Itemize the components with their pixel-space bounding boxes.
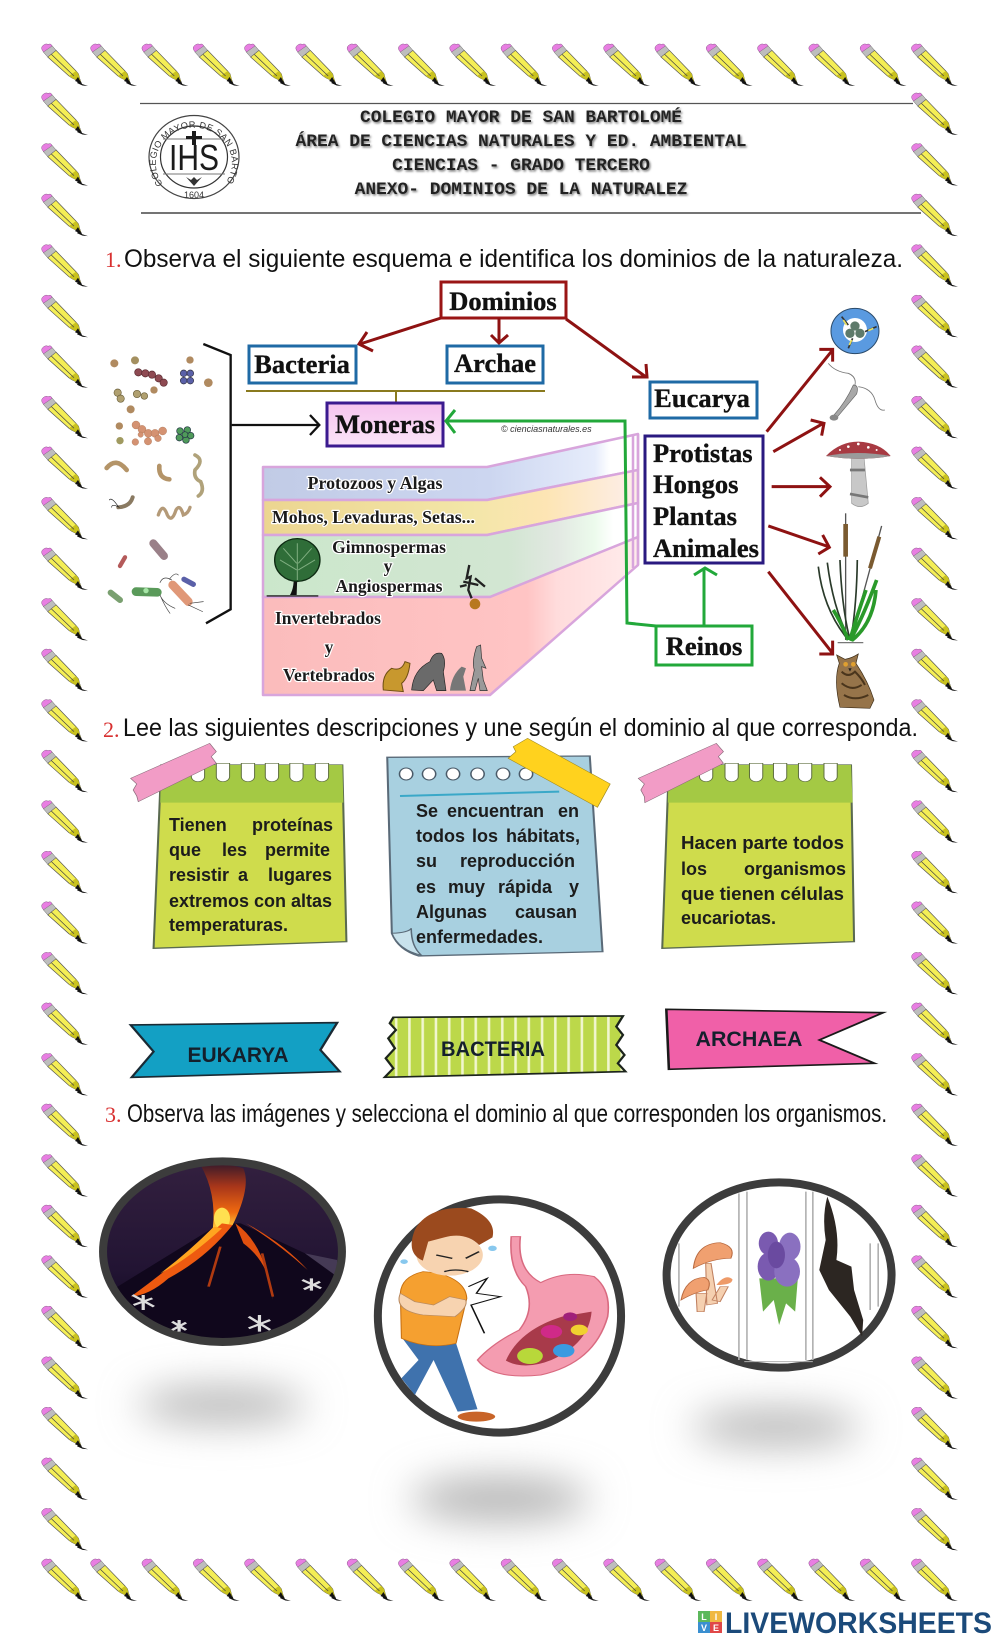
green arrows: [446, 410, 717, 626]
note text: su: [416, 851, 437, 871]
header: [140, 102, 921, 214]
logo: LIVEWORKSHEETS: I: [715, 1612, 717, 1622]
note text: hábitats,: [506, 826, 580, 846]
heading 2: Lee las siguientes descripciones y une según el dominio al que corresponda.: [123, 714, 918, 742]
note text: muy: [448, 877, 485, 897]
shadows under circles: [137, 1387, 861, 1521]
logo: LIVEWORKSHEETS: E: [713, 1623, 719, 1633]
note text: Se: [416, 801, 438, 821]
box: kingdoms: Animales: [653, 533, 759, 563]
icon: bacteria group: [107, 356, 213, 613]
domains diagram: [107, 282, 891, 708]
note text: resistir: [169, 865, 229, 885]
note text: todos: [416, 826, 465, 846]
note text: Tienen: [169, 815, 227, 835]
flowers: [758, 1232, 801, 1325]
note text: encuentran: [447, 801, 544, 821]
layer labels: Angiospermas: [336, 576, 443, 596]
note: left: [131, 743, 346, 948]
note text: extremos con altas: [169, 891, 332, 911]
banner: ARCHAEA: ARCHAEA: [696, 1028, 802, 1051]
banner: BACTERIA: BACTERIA: [441, 1038, 545, 1061]
box: Archae: [447, 346, 543, 383]
arrows from Dominios: [359, 318, 647, 377]
note text: los: [472, 826, 498, 846]
logo: LIVEWORKSHEETS: LIVEWORKSHEETS: [725, 1607, 992, 1640]
note text: lugares: [268, 865, 332, 885]
note text: Hacen parte todos: [681, 833, 844, 853]
icon: owl: [836, 654, 874, 708]
icon: mushroom: [826, 442, 891, 507]
note text: y: [569, 877, 579, 897]
red arrows to kingdoms: [767, 349, 833, 654]
box: kingdoms: [645, 436, 763, 563]
icon: school seal: 1604: [184, 190, 204, 200]
image: boy with stomach ache: [378, 1199, 621, 1433]
layer labels: y: [384, 556, 393, 576]
boy: [399, 1208, 501, 1422]
note: right: [638, 743, 854, 948]
box: Eucarya: Eucarya: [654, 383, 750, 413]
header text: ANEXO- DOMINIOS DE LA NATURALEZ: [355, 180, 687, 200]
note: centre: [387, 738, 610, 956]
stomach: [477, 1237, 608, 1376]
note text: es: [416, 877, 436, 897]
tape: [638, 743, 723, 803]
icon: cattails: [818, 513, 882, 643]
note text: organismos: [744, 859, 846, 879]
box: Dominios: Dominios: [449, 286, 557, 316]
icon: flagellate: [828, 363, 885, 421]
tape: [508, 738, 610, 807]
note text: proteínas: [252, 815, 333, 835]
layer labels: Mohos, Levaduras, Setas...: [272, 507, 475, 527]
box: Reinos: [656, 626, 752, 665]
image: eukaryotes circle: [667, 1182, 892, 1368]
note text: Algunas: [416, 902, 487, 922]
logo: LIVEWORKSHEETS: V: [701, 1623, 707, 1633]
note text: permite: [265, 840, 330, 860]
layer labels: [272, 473, 475, 685]
heading 1: 1.: [105, 247, 122, 272]
note text: enfermedades.: [416, 927, 543, 947]
bird: [819, 1197, 863, 1337]
bracket and arrow to Moneras: [203, 344, 319, 623]
mushrooms: [681, 1243, 732, 1312]
header text: ÁREA DE CIENCIAS NATURALES Y ED. AMBIENTAL: [296, 130, 746, 152]
note text: los: [681, 859, 707, 879]
note text: en: [558, 801, 579, 821]
layer labels: Protozoos y Algas: [308, 473, 443, 493]
box: Moneras: Moneras: [335, 409, 435, 439]
box: Moneras: [327, 403, 443, 446]
icon: school seal: [148, 114, 240, 200]
box: kingdoms: Plantas: [653, 501, 737, 531]
banner: BACTERIA: [385, 1016, 626, 1077]
connector to Moneras: [246, 391, 545, 403]
note text: reproducción: [460, 851, 575, 871]
banner: ARCHAEA: [666, 1009, 883, 1069]
box: Archae: Archae: [454, 348, 536, 378]
note text: que: [169, 840, 201, 860]
icon: school seal: IHS: [169, 137, 219, 178]
header text: COLEGIO MAYOR DE SAN BARTOLOMÉ: [360, 106, 682, 128]
box: Reinos: Reinos: [666, 631, 742, 661]
tree, plant and animal silhouettes: [267, 539, 487, 692]
note text: temperaturas.: [169, 915, 288, 935]
header text: CIENCIAS - GRADO TERCERO: [392, 156, 650, 176]
box: Bacteria: Bacteria: [254, 349, 350, 379]
box: kingdoms: Hongos: [653, 469, 738, 499]
header text: [296, 106, 746, 200]
icon: protist: [831, 308, 879, 354]
layer labels: y: [325, 637, 334, 657]
note text: les: [222, 840, 247, 860]
layer labels: Gimnospermas: [332, 537, 446, 557]
tape: [131, 743, 216, 802]
layered panel: [263, 434, 638, 695]
layer labels: Invertebrados: [275, 608, 381, 628]
heading 2: 2.: [103, 717, 120, 742]
banner: EUKARYA: [131, 1023, 340, 1077]
box: kingdoms: Protistas: [653, 438, 753, 468]
note text: eucariotas.: [681, 908, 776, 928]
note text: causan: [515, 902, 577, 922]
heading 1: Observa el siguiente esquema e identifica los dominios de la naturaleza.: [124, 245, 903, 273]
note text: que tienen células: [681, 884, 844, 904]
layer labels: Vertebrados: [283, 665, 375, 685]
credit: © cienciasnaturales.es: [501, 424, 592, 434]
note text: a: [238, 865, 249, 885]
image: volcano: [101, 1161, 348, 1350]
heading 3: 3.: [105, 1102, 122, 1127]
logo: LIVEWORKSHEETS: L: [701, 1612, 707, 1622]
banner: EUKARYA: EUKARYA: [188, 1044, 288, 1067]
note text: rápida: [498, 877, 553, 897]
